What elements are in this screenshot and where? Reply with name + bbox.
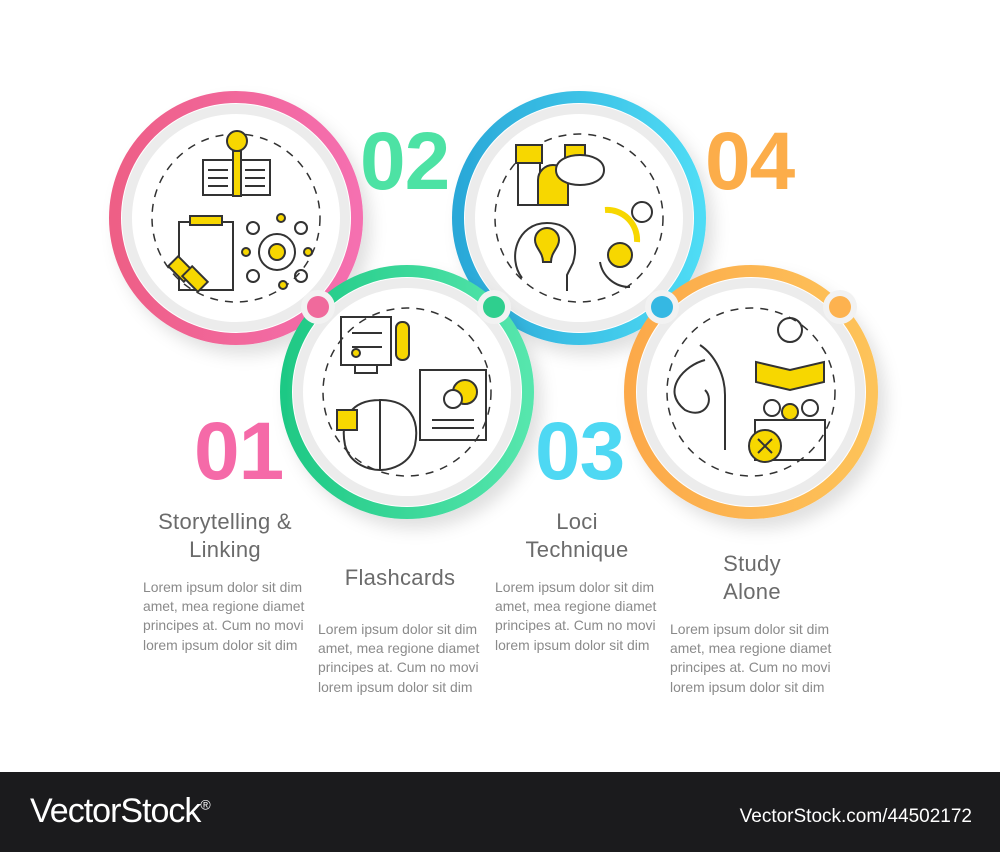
title 2: Flashcards [345,565,455,590]
title 3: Technique [526,537,628,562]
icon: storytelling [168,131,312,292]
circle 3 [458,97,700,339]
numbers [194,116,796,497]
circle 4 [630,271,872,513]
numbers: 01 [194,406,283,497]
footer bar [0,772,1000,852]
icon: loci [515,145,652,291]
text 3: Lorem ipsum dolor sit dim amet, mea regione diamet principes at. Cum no movi lorem ipsum dolor sit dim [495,579,656,653]
title 3 [526,509,628,562]
text 2: Lorem ipsum dolor sit dim amet, mea regione diamet principes at. Cum no movi lorem ipsum dolor sit dim [318,621,479,695]
circle 2 [286,271,528,513]
icon: flashcards [337,317,486,470]
title 3: Loci [556,509,598,534]
icon: study alone [675,318,825,462]
footer id: VectorStock.com/44502172 [740,806,972,827]
title 4: Study [723,551,781,576]
text 4: Lorem ipsum dolor sit dim amet, mea regione diamet principes at. Cum no movi lorem ipsum dolor sit dim [670,621,831,695]
title 4 [723,551,781,604]
numbers: 02 [360,116,449,207]
title 1: Linking [189,537,261,562]
numbers: 03 [535,406,624,497]
text 1: Lorem ipsum dolor sit dim amet, mea regione diamet principes at. Cum no movi lorem ipsum dolor sit dim [143,579,304,653]
title 4: Alone [723,579,781,604]
footer logo: VectorStock® [30,792,210,830]
circle 1 [115,97,357,339]
title 1 [158,509,292,562]
connector dots [301,290,857,324]
title 1: Storytelling & [158,509,292,534]
numbers: 04 [705,116,796,207]
